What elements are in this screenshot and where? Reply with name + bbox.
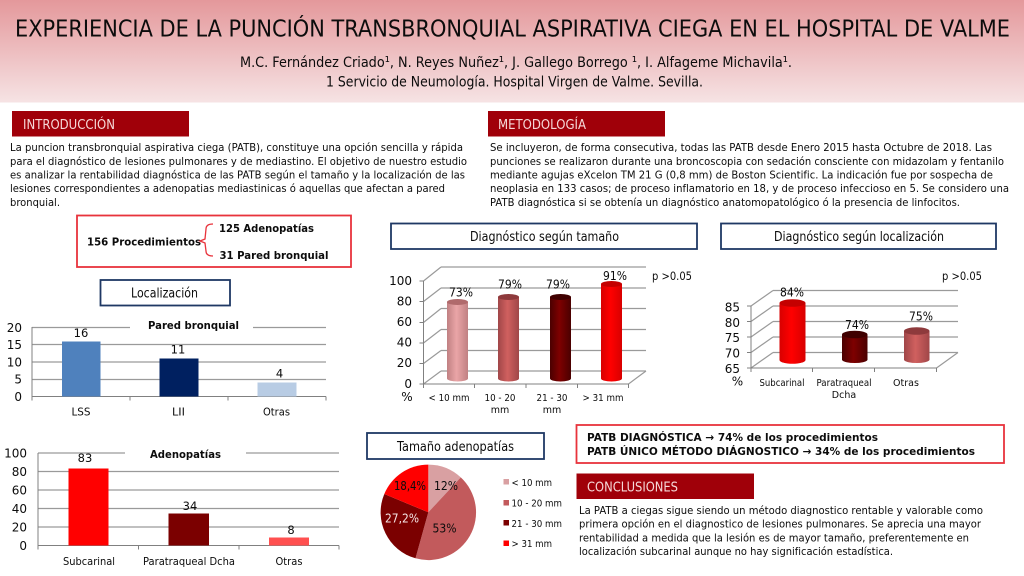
category labels: mm bbox=[543, 405, 561, 416]
pie labels bbox=[385, 479, 458, 536]
legend bbox=[504, 478, 562, 550]
text: introducción bbox=[10, 141, 467, 209]
y axis labels: 20 bbox=[7, 321, 22, 335]
p value: p >0.05 bbox=[652, 269, 692, 283]
category labels bbox=[428, 393, 624, 416]
header banner bbox=[0, 0, 1024, 102]
category labels bbox=[72, 406, 290, 418]
axis unit: % bbox=[732, 374, 743, 388]
y axis labels: 40 bbox=[397, 336, 412, 350]
pie labels: 27,2% bbox=[385, 512, 419, 526]
heading: diagnóstico según tamaño bbox=[391, 224, 697, 249]
text: conclusiones: primera opción en el diagnostico de lesiones pulmonares. Se aprecia una mayor bbox=[579, 518, 981, 530]
y axis labels bbox=[389, 274, 412, 391]
panel: introducción bbox=[10, 111, 467, 209]
y axis labels: 20 bbox=[397, 356, 412, 370]
bar: LSS 16 bbox=[62, 342, 100, 396]
axis unit: % bbox=[401, 390, 413, 404]
chart: adenopatías bbox=[4, 446, 339, 568]
value labels: 16 bbox=[74, 326, 88, 340]
value labels: 74% bbox=[845, 317, 869, 332]
value labels: 83 bbox=[78, 451, 92, 465]
heading: tamaño adenopatías: Tamaño adenopatías bbox=[396, 440, 514, 455]
heading: diagnóstico según localización: Diagnóstico según localización bbox=[774, 230, 944, 245]
category labels: Subcarinal bbox=[63, 555, 115, 568]
category labels: < 10 mm bbox=[428, 393, 470, 404]
text: metodología: PATB diagnóstica si se obtenía un diagnóstico anatomopatológico ó la presencia de linfocitos. bbox=[490, 196, 960, 209]
slice: < 10 mm bbox=[428, 465, 461, 512]
category labels bbox=[63, 555, 303, 568]
y axis labels: 85 bbox=[725, 300, 740, 314]
text: introducción: para el diagnóstico de lesiones pulmonares y de mediastino. El objetivo de nuestro estudio bbox=[10, 155, 467, 168]
y axis labels: 5 bbox=[14, 372, 22, 386]
heading: introducción: INTRODUCCIÓN bbox=[23, 117, 115, 133]
bar: otras 75% bbox=[904, 327, 930, 363]
category labels: Subcarinal bbox=[760, 378, 804, 389]
y axis labels: 100 bbox=[4, 446, 27, 460]
y axis labels: 0 bbox=[14, 390, 22, 404]
chart title: Adenopatías bbox=[150, 448, 221, 461]
text: conclusiones bbox=[579, 504, 983, 558]
y axis labels: 80 bbox=[397, 294, 412, 308]
y axis labels: 60 bbox=[12, 484, 27, 498]
category labels: Otras bbox=[276, 555, 303, 568]
y axis labels: 60 bbox=[397, 315, 412, 329]
text: introducción: es analizar la rentabilidad diagnóstica de las PATB según el tamaño y la localización de las bbox=[10, 168, 465, 182]
bar: > 31 mm 91% bbox=[601, 281, 622, 382]
y axis labels: 20 bbox=[12, 520, 27, 534]
value labels: 75% bbox=[909, 308, 933, 324]
text: conclusiones: rentabilidad a medida que la lesión es de mayor tamaño, preferentemente en bbox=[579, 532, 969, 544]
p value: p >0.05 bbox=[942, 269, 982, 283]
value labels: 11 bbox=[171, 342, 185, 356]
value labels: 84% bbox=[780, 284, 804, 300]
y axis labels: 0 bbox=[19, 539, 27, 553]
heading: diagnóstico según tamaño: Diagnóstico según tamaño bbox=[470, 230, 619, 245]
callout: resultados PATB bbox=[576, 425, 1004, 463]
category labels: Paratraqueal Dcha bbox=[143, 555, 235, 568]
y axis labels bbox=[7, 321, 22, 404]
value labels: 79% bbox=[498, 276, 522, 292]
panel: metodología bbox=[488, 111, 1009, 209]
value labels: 4 bbox=[276, 366, 283, 380]
legend: 21 - 30 mm bbox=[512, 519, 562, 530]
value labels: 34 bbox=[183, 499, 197, 513]
pie labels: 12% bbox=[434, 479, 458, 493]
heading: tamaño adenopatías bbox=[367, 433, 544, 459]
category labels: mm bbox=[491, 405, 509, 416]
y axis labels: 75 bbox=[725, 331, 740, 345]
text: metodología bbox=[490, 141, 1009, 209]
y axis labels: 70 bbox=[725, 346, 740, 360]
chart: diagnóstico según tamaño bbox=[389, 267, 692, 416]
category labels bbox=[760, 378, 919, 401]
brace bbox=[200, 224, 213, 256]
bar: paratraqueal dcha 34 bbox=[168, 514, 209, 546]
value labels: 8 bbox=[287, 523, 295, 537]
bar: otras 4 bbox=[258, 382, 296, 396]
category labels: Otras bbox=[893, 378, 919, 389]
category labels: Paratraqueal bbox=[816, 378, 872, 389]
value labels bbox=[74, 326, 283, 380]
pie labels: 53% bbox=[432, 522, 456, 536]
value labels bbox=[78, 451, 295, 537]
value labels bbox=[449, 268, 627, 300]
slice: > 31 mm bbox=[384, 465, 428, 512]
bar: subcarinal 83 bbox=[68, 468, 108, 546]
heading: localización bbox=[100, 280, 230, 306]
category labels: Otras bbox=[263, 406, 290, 418]
y axis labels bbox=[725, 300, 740, 376]
text: introducción: lesiones correspondientes a adenopatias mediastinicas ó aquellas que afectan a pared bbox=[10, 182, 445, 195]
chart title: Pared bronquial bbox=[148, 319, 239, 332]
y axis labels: 0 bbox=[404, 377, 412, 391]
authors: M.C. Fernández Criado¹, N. Reyes Nuñez¹, J. Gallego Borrego ¹, I. Alfageme Michavila¹. bbox=[240, 55, 792, 71]
text: metodología: mediante agujas eXcelon TM 21 G (0,8 mm) de Boston Scientific. La indicación fue por sospecha de bbox=[490, 168, 993, 182]
callout: procedimientos: 125 Adenopatías bbox=[219, 222, 314, 235]
slice: 10-20 mm bbox=[416, 477, 476, 560]
callout: procedimientos: 31 Pared bronquial bbox=[220, 249, 328, 262]
y axis labels bbox=[4, 446, 27, 553]
slice: 21-30 mm bbox=[381, 494, 428, 558]
y axis labels: 40 bbox=[12, 502, 27, 516]
callout: procedimientos bbox=[77, 216, 351, 267]
panel: conclusiones bbox=[576, 474, 983, 558]
category labels: 21 - 30 bbox=[536, 393, 568, 404]
chart: diagnóstico según localización bbox=[725, 269, 982, 401]
category labels: Dcha bbox=[832, 390, 856, 401]
category labels: LII bbox=[172, 406, 185, 418]
bar: 10-20 mm 79% bbox=[498, 294, 519, 382]
y axis labels: 10 bbox=[7, 356, 22, 370]
text: introducción: bronquial. bbox=[10, 196, 60, 209]
chart: pared bronquial bbox=[7, 319, 326, 418]
pie labels: 18,4% bbox=[394, 479, 426, 493]
bar: otras 8 bbox=[269, 538, 309, 546]
y axis labels: 80 bbox=[12, 465, 27, 479]
heading: conclusiones: CONCLUSIONES bbox=[587, 480, 678, 496]
y axis labels: 15 bbox=[7, 338, 22, 352]
heading: diagnóstico según localización bbox=[721, 224, 996, 249]
legend: < 10 mm bbox=[512, 478, 552, 489]
bar: LII 11 bbox=[160, 358, 198, 396]
value labels: 79% bbox=[546, 276, 570, 292]
y axis labels: 100 bbox=[389, 274, 412, 288]
text: conclusiones: La PATB a ciegas sigue siendo un método diagnostico rentable y valorable como bbox=[579, 504, 983, 517]
chart: tamaño adenopatías pie bbox=[381, 465, 562, 560]
callout: resultados PATB: PATB ÚNICO MÉTODO DIÁGNOSTICO → 34% de los procedimientos bbox=[587, 445, 975, 458]
text: introducción: La puncion transbronquial aspirativa ciega (PATB), constituye una opción sencilla y rápida bbox=[10, 141, 463, 154]
heading: localización: Localización bbox=[131, 286, 198, 302]
legend: > 31 mm bbox=[512, 539, 552, 550]
bar: subcarinal 84% bbox=[780, 299, 806, 364]
y axis labels: 65 bbox=[725, 362, 740, 376]
callout: procedimientos: 156 Procedimientos bbox=[87, 236, 201, 248]
callout: resultados PATB: PATB DIAGNÓSTICA → 74% de los procedimientos bbox=[587, 431, 878, 444]
value labels bbox=[780, 284, 933, 332]
heading: metodología: METODOLOGÍA bbox=[498, 117, 586, 133]
affiliation: 1 Servicio de Neumología. Hospital Virgen de Valme. Sevilla. bbox=[326, 74, 703, 90]
category labels: LSS bbox=[72, 406, 91, 418]
bar: paratraqueal dcha 74% bbox=[842, 331, 868, 363]
y axis labels: 80 bbox=[725, 316, 740, 330]
category labels: 10 - 20 bbox=[484, 393, 516, 404]
category labels: > 31 mm bbox=[582, 393, 624, 404]
text: metodología: Se incluyeron, de forma consecutiva, todas las PATB desde Enero 2015 hasta Octubre de 2018. Las bbox=[490, 141, 992, 154]
bar: < 10 mm 73% bbox=[447, 299, 468, 382]
value labels: 73% bbox=[449, 284, 473, 300]
value labels: 91% bbox=[603, 268, 627, 283]
text: conclusiones: localización subcarinal aunque no hay significación estadística. bbox=[579, 545, 893, 558]
bar: 21-30 mm 79% bbox=[550, 294, 571, 382]
legend: 10 - 20 mm bbox=[512, 498, 562, 510]
